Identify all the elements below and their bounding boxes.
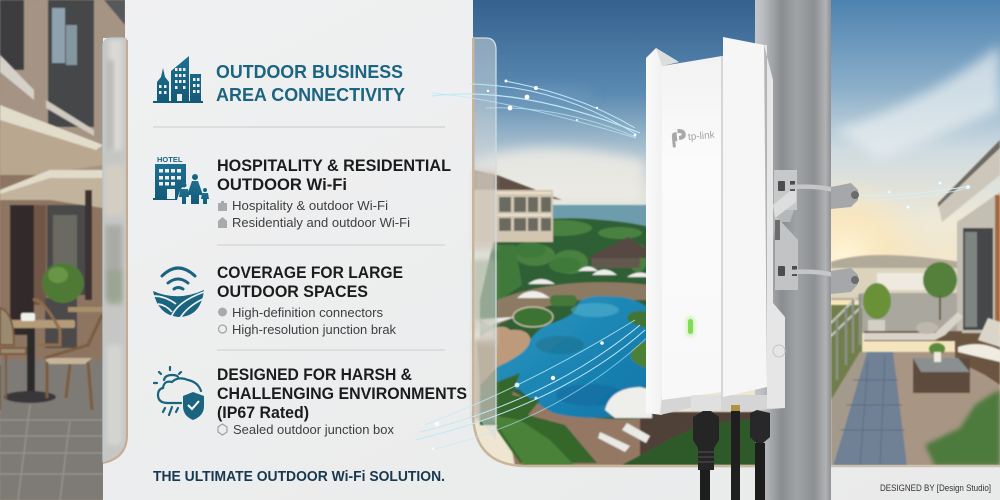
icon: city skyline [153,56,203,103]
loungers [598,423,650,452]
lounger [864,331,962,341]
hotel building [473,170,562,200]
section: coverage [153,263,403,337]
data light streams: lower [415,320,650,450]
balcony scene [831,140,1000,466]
data light sparks: lower [432,341,604,450]
tp-link logo [671,126,716,148]
data light streams: upper [430,81,640,138]
glass strip: left [103,38,127,463]
mount bracket [773,170,859,294]
title: OUTDOOR BUSINESS [216,62,403,82]
foreground plants [497,373,597,463]
section: harsh environments [154,365,467,437]
sea [552,204,646,228]
section: coverage: OUTDOOR SPACES [217,282,368,301]
icon: weather and shield [154,367,204,420]
photo frame curve [473,412,755,466]
sky [473,0,763,466]
pole lower section [755,466,831,500]
lower deck behind device [640,411,754,456]
railing [831,293,862,336]
section: harsh environments: (IP67 Rated) [217,403,309,422]
pool [497,296,650,418]
heading: COVERAGE FOR LARGE [217,263,403,282]
umbrellas [480,266,653,325]
icon: wifi over fields [153,268,204,318]
terraces [497,282,650,325]
clouds [473,45,1000,205]
access point device [646,37,859,500]
section: hospitality: OUTDOOR Wi-Fi [217,175,347,194]
palms [497,242,581,300]
bullet: junction: High-resolution junction brak [232,323,397,337]
pole [755,0,831,466]
heading: HOSPITALITY & RESIDENTIAL [217,156,451,175]
status LED [686,316,695,337]
bullet: sealed box: Sealed outdoor junction box [233,423,395,437]
sofa [955,333,1000,385]
resort grounds [473,170,760,468]
tp-link logo: tp-link [688,130,716,143]
bullet: connectors: High-definition connectors [232,306,383,320]
title: AREA CONNECTIVITY [216,85,405,105]
glass strip: right [472,38,496,440]
bottom strip highlight [527,465,1000,467]
left wing [646,48,679,415]
bushes [513,307,553,327]
left cafe photo [0,0,125,500]
tagline: THE ULTIMATE OUTDOOR Wi-Fi SOLUTION. [153,469,445,485]
resort scene photo [473,0,1000,468]
floor [892,351,1000,465]
section: hospitality [153,155,451,230]
underside housing [660,395,785,415]
bullet: residential: Residentialy and outdoor Wi-Fi [232,216,410,230]
data light streams: right [858,181,970,209]
title [216,62,405,105]
header block [153,56,405,105]
cables and glands [691,395,770,500]
right wing [723,37,767,397]
icon: hotel and family: HOTEL [157,155,183,164]
coffee table [913,358,970,393]
icon: hotel and family [153,155,209,204]
heading: DESIGNED FOR HARSH & [217,365,412,384]
side box [764,45,785,408]
data light sparks: upper [487,80,636,136]
front panel [662,56,722,400]
bullet: hospitality: Hospitality & outdoor Wi-Fi [232,199,388,213]
section: harsh environments: CHALLENGING ENVIRONMENTS [217,384,467,403]
hut [587,237,648,258]
